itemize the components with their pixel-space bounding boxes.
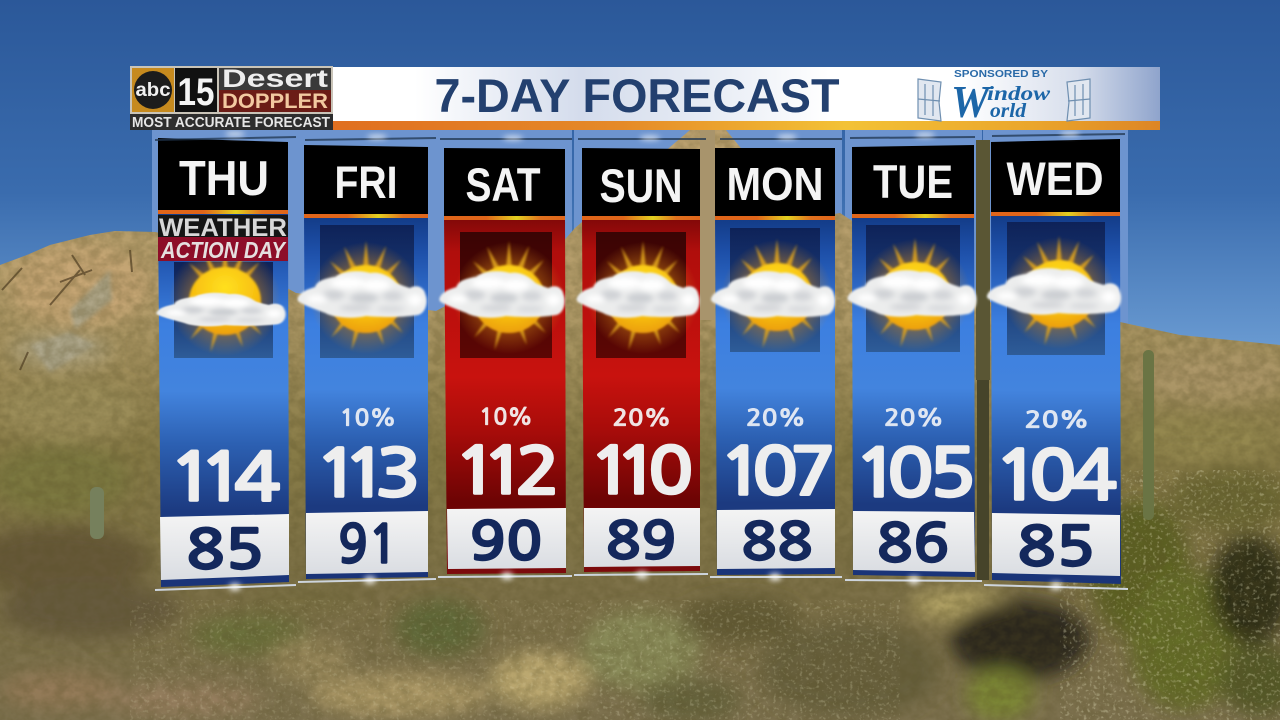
high temperature: 104	[993, 443, 1118, 511]
icon box	[730, 228, 820, 352]
low temperature card	[717, 509, 835, 569]
accent rule	[715, 216, 835, 220]
high temperature: 107	[718, 439, 837, 505]
accent rule	[444, 216, 565, 220]
logo: abc15 Desert Doppler: 15	[178, 71, 214, 114]
icon: sun	[453, 241, 565, 354]
icon: cloud	[439, 271, 565, 318]
tagline	[130, 114, 333, 130]
badge: weather action day	[158, 214, 288, 263]
title: 7-DAY FORECAST	[434, 69, 840, 122]
day body	[304, 214, 428, 579]
icon box	[174, 262, 273, 358]
low temperature: 91	[338, 518, 398, 571]
icon: cloud	[847, 270, 977, 317]
abc badge	[132, 68, 174, 112]
low temperature card	[853, 511, 975, 572]
sponsor wordmark: W	[951, 76, 992, 127]
low temperature card	[992, 513, 1120, 576]
day body	[444, 216, 566, 574]
panel: glass column frame	[152, 130, 1128, 330]
icon: right window	[1067, 79, 1090, 121]
icon: cloud	[987, 268, 1121, 315]
icon: cloud	[711, 271, 835, 318]
low temperature: 85	[186, 525, 264, 578]
icon: cloud	[577, 271, 699, 318]
icon: sun	[859, 238, 971, 351]
icon: sun	[1003, 236, 1115, 349]
high temperature: 105	[853, 440, 976, 507]
day name: MON	[726, 158, 824, 210]
icon: sun	[169, 243, 281, 356]
low temperature card	[447, 508, 566, 569]
Desert wordmark	[219, 68, 331, 90]
accent rule	[304, 214, 428, 218]
logo: abc15 Desert Doppler	[130, 65, 333, 131]
Doppler wordmark	[219, 90, 331, 112]
day name: TUE	[873, 155, 953, 208]
icon box	[460, 232, 552, 358]
day name: FRI	[334, 157, 398, 208]
badge: weather action day: ACTION DAY	[160, 237, 287, 263]
header	[715, 148, 835, 216]
low temperature: 89	[606, 515, 676, 567]
rock faces	[30, 270, 112, 372]
sponsor: Window World	[918, 68, 1090, 127]
panel: SUN	[577, 148, 700, 572]
high temperature: 110	[588, 439, 694, 504]
precipitation chance: 10%	[479, 407, 533, 429]
high temperature: 112	[453, 439, 561, 504]
day body	[582, 216, 700, 572]
panel: WED	[987, 139, 1121, 584]
panel: THU	[156, 138, 289, 587]
low temperature card	[306, 511, 428, 574]
background: sky	[0, 0, 1280, 350]
icon: cloud	[156, 293, 286, 326]
icon: sun	[587, 241, 699, 354]
background: saguaro cacti	[90, 130, 1154, 580]
day body	[715, 216, 835, 575]
low temperature: 90	[470, 515, 542, 568]
high temperature: 114	[168, 444, 281, 511]
header	[582, 148, 700, 216]
panel: TUE	[847, 145, 977, 577]
icon box	[596, 232, 686, 358]
sponsor: Window World: orld	[990, 100, 1027, 122]
icon: cloud	[297, 271, 427, 318]
precipitation chance: 20%	[746, 408, 806, 430]
low temperature: 86	[876, 517, 950, 570]
day name: THU	[179, 152, 269, 206]
panel: SAT	[439, 148, 566, 574]
precipitation chance: 20%	[884, 408, 944, 430]
low temperature card	[584, 508, 700, 567]
day body	[852, 214, 975, 577]
precipitation chance: 20%	[612, 408, 672, 430]
header	[852, 145, 974, 214]
badge: weather action day: WEATHER	[159, 214, 287, 242]
icon box	[866, 225, 960, 352]
icon: sun	[310, 241, 422, 354]
high temperature: 113	[314, 441, 422, 507]
day body	[158, 211, 289, 587]
low temperature: 85	[1017, 522, 1095, 575]
header	[158, 138, 288, 211]
day name: SUN	[600, 159, 682, 212]
icon: sun	[721, 239, 833, 352]
day name: WED	[1006, 152, 1104, 205]
accent rule	[582, 216, 700, 220]
logo: abc15 Desert Doppler: DOPPLER	[222, 90, 328, 113]
day body	[991, 212, 1121, 584]
panel: FRI	[297, 145, 428, 579]
frame edges	[155, 132, 1128, 591]
logo: abc15 Desert Doppler: abc	[136, 80, 171, 101]
precipitation chance: 20%	[1024, 410, 1090, 432]
logo: abc15 Desert Doppler: MOST ACCURATE FORECAST	[132, 115, 330, 131]
sponsor label: SPONSORED BY	[954, 68, 1048, 80]
accent rule	[158, 210, 288, 214]
icon: left window	[918, 79, 941, 121]
day name: SAT	[466, 158, 541, 211]
accent rule	[852, 214, 974, 218]
low temperature card	[160, 514, 289, 580]
icon box	[1007, 222, 1105, 355]
title banner	[332, 67, 1160, 130]
channel number	[175, 68, 217, 112]
header	[444, 148, 565, 216]
panel: MON	[711, 148, 837, 575]
low temperature: 88	[741, 516, 813, 568]
accent rule	[991, 212, 1120, 216]
sponsor: Window World: indow	[987, 83, 1051, 105]
precipitation chance: 10%	[340, 408, 396, 430]
header	[991, 139, 1120, 212]
header	[304, 145, 428, 214]
logo: abc15 Desert Doppler: Desert	[222, 65, 329, 93]
icon box	[320, 225, 414, 358]
